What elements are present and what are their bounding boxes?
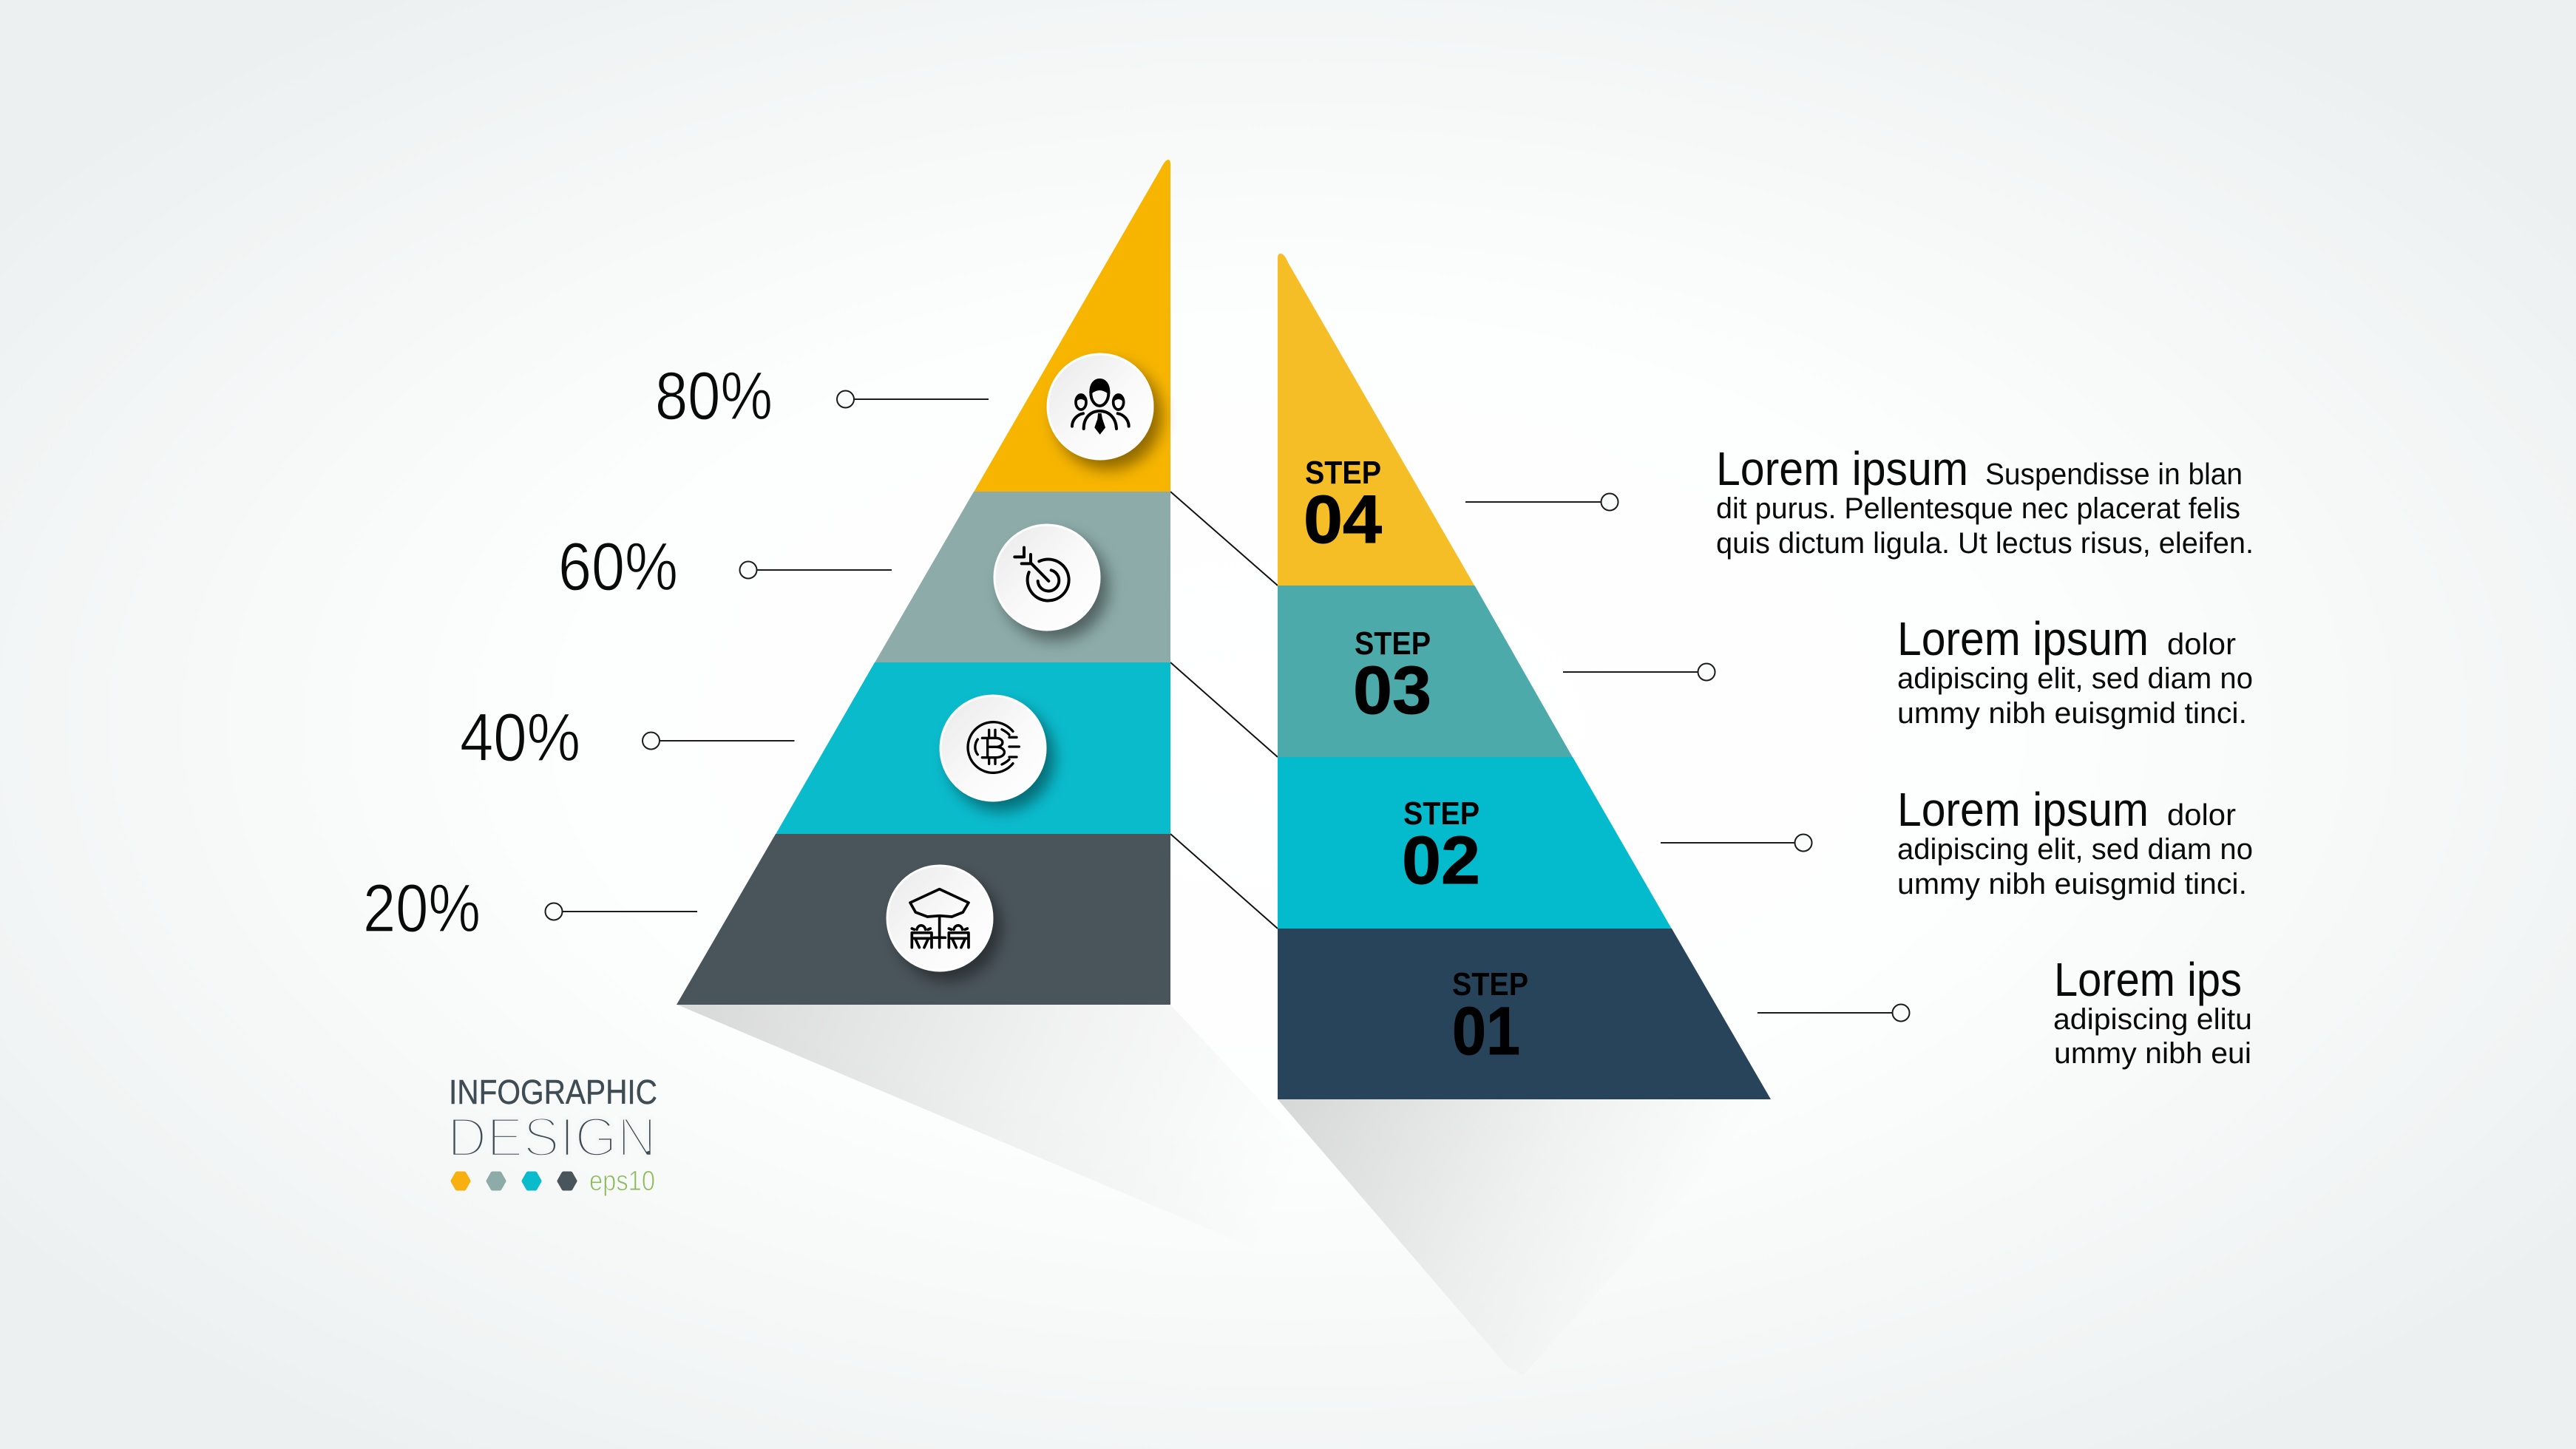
logo word DESIGN: DESIGN	[447, 1106, 657, 1168]
step 03 label: 03	[1353, 653, 1431, 728]
left pyramid	[677, 160, 1170, 1005]
icon disc: people	[1048, 354, 1153, 459]
text block step 02	[1897, 783, 2253, 900]
leader step 03	[1563, 664, 1715, 680]
segment: yellow step 04	[1278, 254, 1474, 586]
step 04 label: 04	[1304, 482, 1382, 557]
text block step 01: Lorem ips	[2054, 953, 2242, 1006]
segment: navy step 01	[1278, 929, 1771, 1099]
leader 80%	[837, 390, 989, 408]
segment: teal step 03	[1278, 586, 1573, 757]
text block step 04: Lorem ipsum	[1716, 442, 1968, 495]
leader 40%	[643, 732, 794, 750]
percent label 20%: 20%	[363, 871, 481, 946]
text block step 02: adipiscing elit, sed diam no	[1897, 833, 2253, 866]
logo hexagons	[453, 1173, 575, 1189]
logo word INFOGRAPHIC: INFOGRAPHIC	[449, 1073, 657, 1111]
text block step 03: dolor	[2167, 627, 2236, 661]
leader step 04	[1465, 494, 1618, 510]
step 03 label: STEP	[1355, 625, 1431, 662]
logo eps10: eps10	[589, 1166, 655, 1197]
leader 20%	[546, 903, 697, 920]
icon: team with tie	[1072, 380, 1129, 434]
leader 60%	[739, 562, 892, 578]
icon: bitcoin coin	[968, 722, 1019, 773]
segment: cyan 40%	[776, 662, 1170, 834]
percent label 60%: 60%	[558, 529, 678, 605]
icon: umbrella and tables	[910, 889, 969, 948]
leader step 01	[1758, 1004, 1909, 1022]
text block step 04: dit purus. Pellentesque nec placerat felis	[1716, 492, 2240, 525]
icon disc: bitcoin	[940, 696, 1045, 801]
segment: dark 20%	[677, 834, 1170, 1005]
text block step 02: Lorem ipsum	[1897, 783, 2149, 836]
text block step 01: adipiscing elitu	[2053, 1003, 2252, 1036]
text block step 01	[2053, 953, 2252, 1070]
text block step 04	[1716, 442, 2254, 560]
text block step 03: Lorem ipsum	[1897, 612, 2149, 665]
text block step 01: ummy nibh eui	[2054, 1037, 2251, 1070]
icon: target with arrow	[1014, 548, 1069, 600]
shadow: left pyramid	[677, 1005, 1508, 1368]
shadow: right pyramid	[1278, 1099, 1771, 1375]
connector lines between pyramids	[1170, 492, 1278, 929]
text block step 02: dolor	[2167, 798, 2236, 832]
step 04 label: STEP	[1305, 455, 1381, 491]
text block step 04: quis dictum ligula. Ut lectus risus, eleifen.	[1716, 527, 2254, 560]
logo: infographic design eps10	[447, 1073, 657, 1197]
step 02 label: STEP	[1403, 795, 1479, 832]
icon disc: target	[994, 525, 1099, 630]
text block step 02: ummy nibh euisgmid tinci.	[1897, 868, 2247, 900]
segment: cyan step 02	[1278, 757, 1672, 929]
step 01 label: STEP	[1452, 966, 1528, 1002]
text block step 03: ummy nibh euisgmid tinci.	[1897, 697, 2247, 730]
text block step 03: adipiscing elit, sed diam no	[1897, 662, 2253, 695]
percent label 40%: 40%	[460, 700, 580, 776]
segment: yellow 80%	[974, 160, 1170, 492]
leader step 02	[1661, 834, 1811, 852]
icon disc: cafe umbrella	[887, 866, 992, 971]
step 01 label: 01	[1452, 994, 1520, 1069]
text block step 03	[1897, 612, 2253, 730]
percent label 80%: 80%	[655, 359, 773, 434]
segment: grey 60%	[875, 492, 1170, 662]
text block step 04: Suspendisse in blan	[1985, 457, 2243, 491]
right pyramid	[1278, 254, 1771, 1099]
step 02 label: 02	[1402, 823, 1480, 898]
